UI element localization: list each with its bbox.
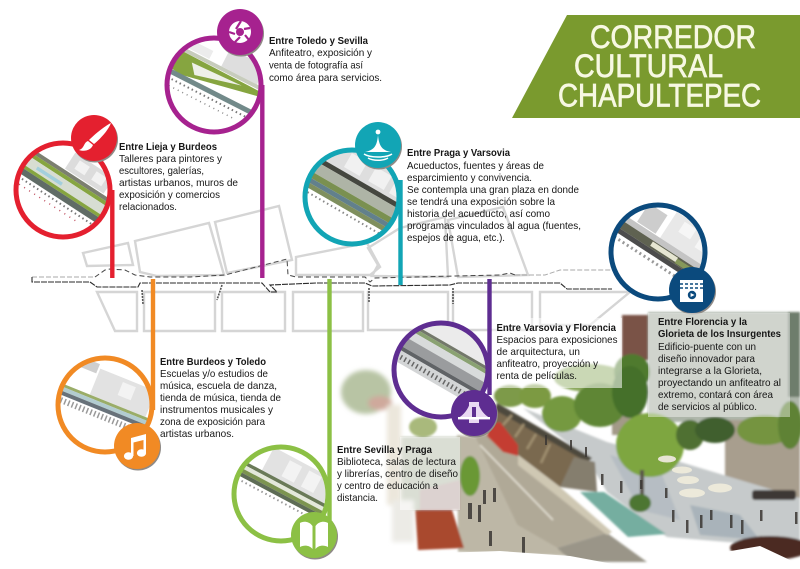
text block: Praga y Varsovia: esparcimiento y convivencia.	[407, 173, 532, 184]
side sidewalk	[457, 435, 573, 556]
panel: Varsovia y Florencia circle	[392, 320, 488, 420]
panel: Burdeos y Toledo circle	[56, 356, 154, 454]
text block: Lieja y Burdeos: artistas urbanos, muros de	[119, 178, 238, 189]
text block: Sevilla y Praga: y librerías, centro de diseño	[337, 469, 458, 480]
icon: open book	[291, 512, 338, 560]
text block: Lieja y Burdeos: relacionados.	[119, 202, 177, 213]
title: CORREDOR	[590, 19, 756, 55]
text block: Toledo y Sevilla: Entre Toledo y Sevilla	[269, 36, 368, 47]
title: CULTURAL	[574, 48, 723, 84]
text block: Burdeos y Toledo: tienda de música, tienda de	[160, 393, 281, 404]
icon: music note	[114, 423, 161, 470]
text block: Lieja y Burdeos	[119, 142, 238, 213]
text block: Sevilla y Praga: Biblioteca, salas de lectura	[337, 457, 456, 468]
umbrellas and pedestrians	[468, 435, 798, 554]
title: CHAPULTEPEC	[558, 78, 761, 114]
text block: Praga y Varsovia: Acueductos, fuentes y áreas de	[407, 161, 544, 172]
connector line: magenta	[260, 85, 264, 278]
text block: Burdeos y Toledo: música, escuela de danza,	[160, 381, 277, 392]
text block: Praga y Varsovia: espejos de agua, etc.).	[407, 233, 505, 244]
text block: Burdeos y Toledo: Entre Burdeos y Toledo	[160, 357, 266, 368]
dark planting lower right	[730, 536, 800, 560]
panel: Lieja y Burdeos circle	[14, 140, 112, 240]
bus	[487, 422, 518, 456]
fountain	[560, 457, 597, 492]
connector line: green	[327, 279, 332, 520]
map: street blocks	[83, 206, 630, 331]
tree canopy	[494, 354, 800, 500]
text block: Toledo y Sevilla: como área para servicios.	[269, 73, 382, 84]
icon: bridge	[451, 390, 498, 438]
text block: Sevilla y Praga: y centro de educación a	[337, 481, 438, 492]
icon: fountain	[355, 122, 402, 170]
road	[475, 433, 607, 548]
text block: Praga y Varsovia: Entre Praga y Varsovia	[407, 148, 510, 159]
text block: Sevilla y Praga	[337, 437, 460, 510]
text block: Florencia y Glorieta: de servicios al público.	[658, 402, 757, 413]
aqueduct wall	[488, 403, 592, 487]
text block: Praga y Varsovia: Se contempla una gran plaza en donde	[407, 185, 579, 196]
text block: Florencia y Glorieta: proyectando un anfiteatro al	[658, 378, 781, 389]
text block: Florencia y Glorieta	[648, 313, 790, 417]
text block: Florencia y Glorieta: Glorieta de los Insurgentes	[658, 329, 781, 340]
text block: Burdeos y Toledo	[160, 357, 281, 440]
panel: Florencia y Glorieta circle	[608, 202, 708, 302]
text block: Varsovia y Florencia: Espacios para exposiciones	[496, 335, 618, 346]
text block: Praga y Varsovia: se tendrá una exposición sobre la	[407, 197, 555, 208]
text block: Lieja y Burdeos: Entre Lieja y Burdeos	[119, 142, 217, 153]
cobbles	[557, 533, 647, 562]
text block: Toledo y Sevilla	[269, 36, 382, 84]
text block: Florencia y Glorieta: Edificio-puente con un	[658, 342, 756, 353]
text block: Varsovia y Florencia: anfiteatro, proyección y	[496, 359, 599, 370]
torn white bottom edge	[385, 546, 800, 569]
panel: Toledo y Sevilla circle	[164, 36, 264, 134]
buildings behind the plaza	[612, 312, 800, 505]
panel: title banner	[512, 15, 800, 118]
title	[558, 19, 761, 114]
icon: film clapper	[669, 267, 716, 314]
text block: Burdeos y Toledo: zona de exposición para	[160, 417, 265, 428]
text block: Varsovia y Florencia	[492, 318, 622, 388]
text block: Burdeos y Toledo: instrumentos musicales y	[160, 405, 274, 416]
text block: Praga y Varsovia: programas vinculados al agua (fuentes,	[407, 221, 581, 232]
reflecting pool	[580, 492, 666, 537]
panel: Praga y Varsovia circle	[302, 148, 398, 246]
text block: Praga y Varsovia: historia del acueducto, así como	[407, 209, 550, 220]
text block: Florencia y Glorieta: extremo, contará con área	[658, 390, 773, 401]
text block: Sevilla y Praga: distancia.	[337, 493, 378, 504]
icon: camera aperture	[217, 9, 264, 56]
text block: Toledo y Sevilla: venta de fotografía así	[269, 60, 363, 72]
text block: Florencia y Glorieta: diseño innovador para	[658, 354, 755, 365]
text block: Sevilla y Praga: Entre Sevilla y Praga	[337, 445, 432, 456]
text block: Lieja y Burdeos: Talleres para pintores y	[119, 154, 223, 165]
faded left edge of photo	[341, 370, 414, 542]
garden	[400, 437, 460, 510]
text block: Burdeos y Toledo: artistas urbanos.	[160, 429, 234, 440]
map: corridor outline	[32, 259, 612, 304]
icon: paint brush	[71, 115, 118, 162]
text block: Lieja y Burdeos: escultores, galerías,	[119, 166, 204, 177]
text block: Varsovia y Florencia: Entre Varsovia y Florencia	[496, 323, 616, 334]
connector line: red	[110, 190, 115, 278]
text block: Florencia y Glorieta: integrarse a la Glorieta,	[658, 366, 762, 377]
panel: Sevilla y Praga circle	[232, 444, 328, 544]
text block: Lieja y Burdeos: exposición y comercios	[119, 190, 220, 201]
connector line: orange	[151, 279, 155, 410]
plaza paving	[523, 408, 800, 546]
connector line: teal	[398, 180, 403, 285]
connector line: purple	[487, 279, 492, 395]
text block: Varsovia y Florencia: renta de películas.	[496, 371, 577, 382]
text block: Florencia y Glorieta: Entre Florencia y la	[658, 317, 747, 328]
text block: Burdeos y Toledo: Escuelas y/o estudios de	[160, 369, 268, 380]
text block: Toledo y Sevilla: Anfiteatro, exposición y	[269, 48, 373, 59]
photo: street and plaza rendering	[341, 312, 800, 569]
text block: Praga y Varsovia	[407, 148, 581, 244]
text block: Varsovia y Florencia: de arquitectura, un	[496, 347, 580, 358]
